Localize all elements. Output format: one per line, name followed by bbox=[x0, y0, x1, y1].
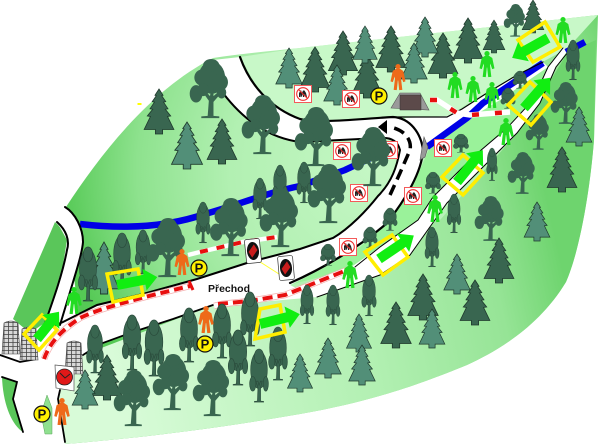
small green island bbox=[41, 395, 52, 434]
green direction arrows bbox=[28, 28, 559, 346]
label: crossing: Přechod bbox=[208, 283, 250, 295]
red-white trail: to orange walker bbox=[188, 237, 277, 255]
prohibition signs bbox=[244, 238, 295, 281]
stone gates bbox=[2, 321, 83, 374]
lower-left green patch bbox=[2, 377, 23, 432]
orange walkers bbox=[55, 64, 405, 425]
direction arrow on hairpin bbox=[378, 120, 410, 195]
parking symbols bbox=[34, 88, 387, 422]
red dashes on trail bbox=[200, 237, 277, 252]
red-white trail: along the road bbox=[44, 281, 193, 359]
large deciduous trees bbox=[114, 4, 578, 426]
tunnel mouth bbox=[420, 137, 428, 160]
left green strip bbox=[13, 222, 68, 333]
small bushy trees bbox=[320, 71, 527, 265]
yellow frames bbox=[24, 22, 560, 350]
river bbox=[80, 42, 585, 227]
dark pines bbox=[92, 0, 577, 400]
tree in front of hidden sign bbox=[352, 127, 390, 186]
road: left side branch bbox=[43, 207, 83, 333]
yellow link line between signs bbox=[254, 258, 279, 274]
no-entry signs bbox=[294, 86, 452, 256]
green walkers bbox=[67, 17, 570, 314]
bright triangle between paths bbox=[293, 64, 548, 284]
poplars bbox=[78, 40, 580, 402]
red-white trail: by the shelter bbox=[430, 100, 510, 115]
small yellow mark bbox=[138, 103, 142, 105]
red-white trail: crossing bbox=[214, 270, 347, 306]
shelter bbox=[391, 93, 429, 110]
path: lower walking path bbox=[213, 48, 568, 306]
red gate sign bbox=[55, 365, 74, 391]
light upper meadow bbox=[240, 15, 598, 122]
road: main white road with hairpin bbox=[44, 57, 423, 390]
road: white wedge to the upper right bbox=[405, 62, 548, 150]
red dashes by the shelter bbox=[430, 100, 510, 115]
no-entry sign behind tree bbox=[380, 142, 398, 158]
light pines bbox=[72, 17, 592, 409]
